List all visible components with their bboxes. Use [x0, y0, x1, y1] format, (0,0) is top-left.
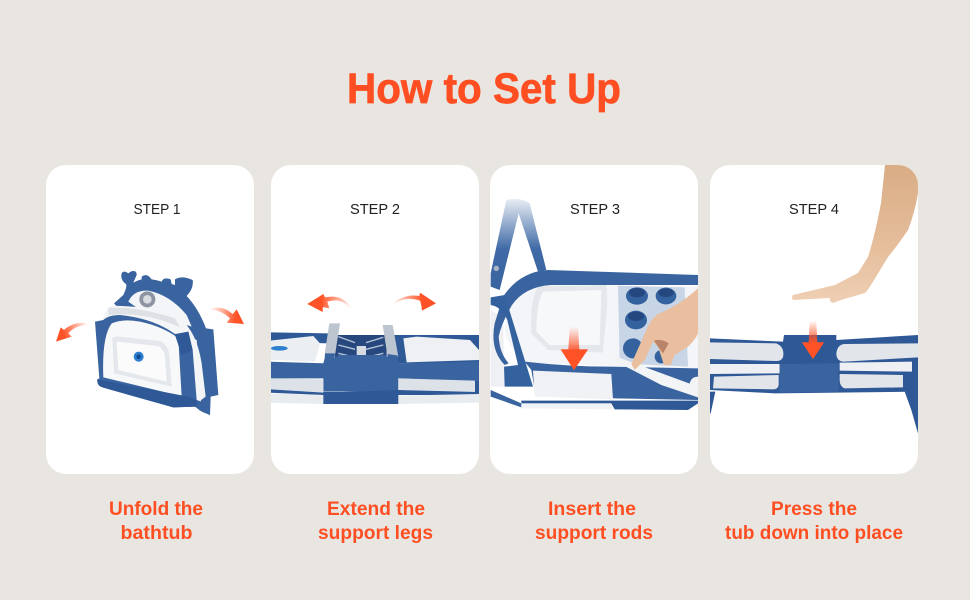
title: How to Set Up — [347, 66, 621, 113]
step 2 label: STEP 2 — [350, 202, 400, 218]
illustration: support legs — [270, 293, 480, 404]
caption: step 3 — [535, 498, 653, 544]
panel: step 4 — [710, 165, 918, 474]
caption: step 1 — [109, 498, 203, 544]
panel: step 2 — [270, 165, 480, 474]
arrow: right — [391, 293, 436, 307]
panel: step 1 — [46, 165, 254, 474]
caption: step 4: tub down into place — [725, 522, 903, 544]
caption: step 3: support rods — [535, 522, 653, 544]
caption: step 4 — [725, 498, 903, 544]
arrow: right — [208, 307, 244, 324]
icon: hand pointing — [631, 288, 698, 370]
illustration: support rods — [491, 199, 698, 410]
illustration: folded bathtub — [56, 271, 244, 415]
caption: step 3: Insert the — [548, 498, 636, 520]
step 4 label: STEP 4 — [789, 202, 839, 218]
caption: step 2 — [318, 498, 433, 544]
step 1 label: STEP 1 — [134, 202, 180, 218]
panel: step 3 — [490, 165, 698, 474]
icon: hand pressing — [792, 165, 918, 303]
illustration: tub top — [710, 322, 918, 433]
arrow: left — [56, 323, 90, 342]
arrow: left — [308, 294, 351, 308]
arrow: down — [802, 322, 824, 359]
caption: step 2: support legs — [318, 522, 433, 544]
arrow: down — [561, 327, 588, 370]
step 3 label: STEP 3 — [570, 202, 620, 218]
caption: step 4: Press the — [771, 498, 857, 520]
caption: step 1: Unfold the — [109, 498, 203, 520]
caption: step 1: bathtub — [120, 522, 193, 544]
caption: step 2: Extend the — [327, 498, 425, 520]
